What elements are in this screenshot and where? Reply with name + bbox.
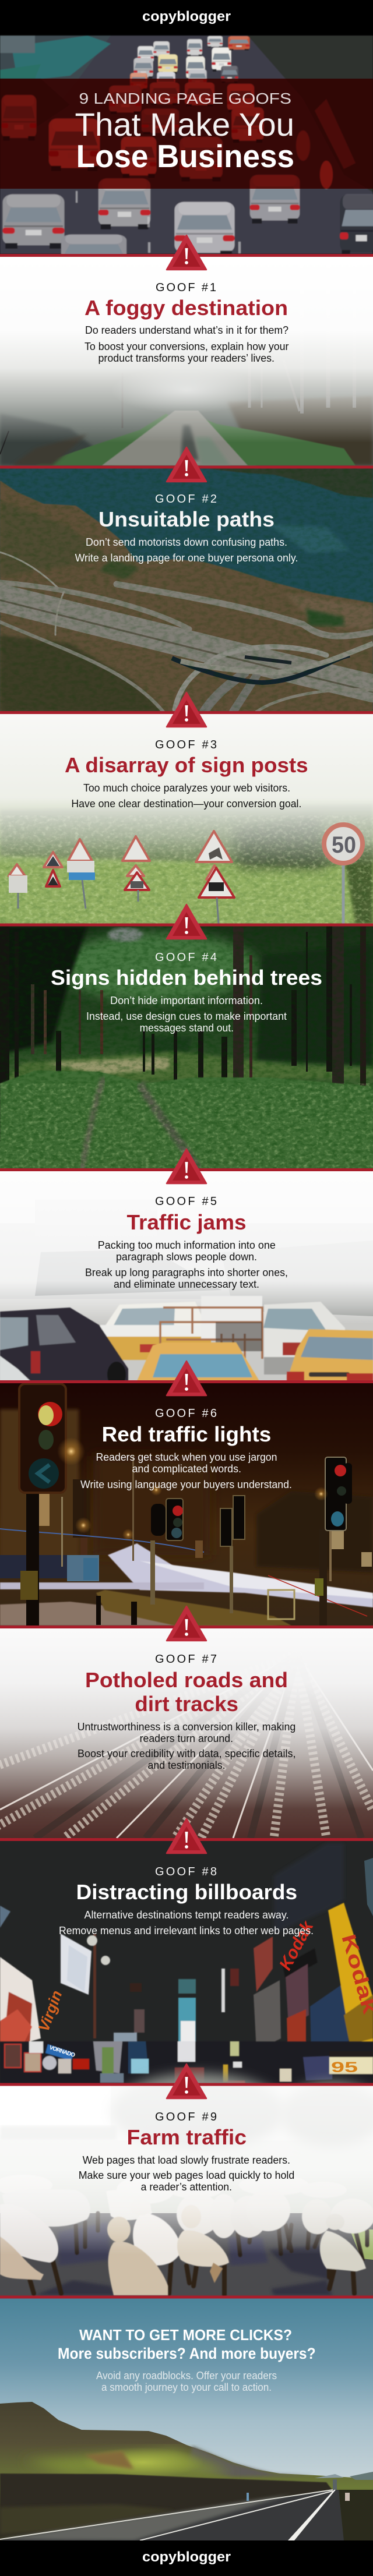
body text [79, 2154, 294, 2193]
billboard lettering [34, 1917, 373, 2076]
heading: Red traffic lights [102, 1422, 271, 1446]
panel: goof 5 [0, 1149, 373, 1387]
heading [85, 1668, 288, 1716]
panel: goof 4 [0, 904, 373, 1169]
body text: and eliminate unnecessary text. [114, 1278, 259, 1290]
billboard lettering: VORNADO [48, 2044, 76, 2059]
goof label: GOOF #6 [155, 1407, 218, 1420]
goof label: GOOF #8 [155, 1865, 218, 1878]
body text: Untrustworthiness is a conversion killer, making [78, 1721, 295, 1733]
header bar with logo [0, 0, 373, 36]
body text: and testimonials. [148, 1759, 225, 1771]
title: That Make You [75, 106, 294, 143]
red divider [0, 711, 373, 714]
icon: warning triangle [167, 1361, 206, 1395]
billboard lettering: Kodak [276, 1917, 318, 1973]
body text [75, 536, 298, 564]
photo: open road under mountain [0, 2298, 373, 2540]
goof label: GOOF #1 [156, 281, 217, 294]
body text: paragraph slows people down. [116, 1251, 257, 1263]
fog overlay [0, 1628, 373, 1809]
title: Lose Business [76, 138, 294, 174]
billboard lettering: Virgin [34, 1988, 66, 2034]
fog overlay [0, 2086, 373, 2255]
red divider [0, 2296, 373, 2298]
panel: goof 6 [0, 1361, 373, 1627]
call to action heading [58, 2326, 316, 2362]
body text: To boost your conversions, explain how your [85, 341, 289, 352]
red divider [0, 1380, 373, 1383]
body text: Boost your credibility with data, specific details, [78, 1748, 296, 1759]
body text: Do readers understand what’s in it for them? [85, 324, 288, 336]
red title band [0, 79, 373, 189]
red divider [0, 1168, 373, 1171]
goof label: GOOF #9 [155, 2111, 218, 2123]
icon: warning triangle [167, 235, 206, 270]
heading: Traffic jams [127, 1210, 246, 1234]
body text [80, 1451, 292, 1490]
icon: warning triangle [167, 447, 206, 482]
heading: Unsuitable paths [98, 507, 275, 531]
body text: Have one clear destination—your conversion goal. [71, 798, 301, 810]
photo: road signs on a green verge [0, 714, 373, 925]
heading: A disarray of sign posts [65, 753, 308, 777]
goof label: GOOF #4 [155, 951, 218, 964]
body text: a reader’s attention. [141, 2181, 232, 2193]
icon: warning triangle [167, 1149, 206, 1183]
panel: goof 2 [0, 447, 373, 713]
body text: Packing too much information into one [98, 1239, 276, 1251]
body text: Write a landing page for one buyer persona only. [75, 552, 298, 564]
icon: warning triangle [167, 692, 206, 727]
body text [71, 782, 301, 810]
heading: Potholed roads and [85, 1668, 288, 1692]
photo: congested road from above [0, 36, 373, 274]
logo: copyblogger: copyblogger [142, 2549, 231, 2565]
panel: call to action [0, 2296, 373, 2540]
body text: Too much choice paralyzes your web visitors. [83, 782, 290, 794]
photo: forest track [0, 926, 373, 1169]
body text: Instead, use design cues to make important [86, 1010, 287, 1022]
icon: warning triangle [167, 2064, 206, 2098]
photo: traffic jam [0, 1171, 373, 1387]
red divider [0, 1838, 373, 1841]
body text [85, 324, 289, 364]
photo: highway interchange aerial [0, 468, 373, 713]
call to action text: a smooth journey to your call to action. [101, 2381, 272, 2393]
panel: goof 1 [0, 235, 373, 466]
icon: warning triangle [167, 1606, 206, 1641]
body text: and complicated words. [132, 1463, 241, 1475]
footer bar with logo [0, 2540, 373, 2576]
heading: A foggy destination [85, 296, 288, 320]
goof label: GOOF #2 [155, 493, 218, 506]
red divider [0, 254, 373, 257]
call to action heading: More subscribers? And more buyers? [58, 2345, 316, 2362]
heading: Distracting billboards [76, 1880, 297, 1904]
body text [85, 1239, 288, 1290]
heading: dirt tracks [135, 1692, 238, 1716]
body text: Remove menus and irrelevant links to other web pages. [59, 1925, 314, 1937]
logo: copyblogger: copyblogger [142, 9, 231, 24]
goof label: GOOF #5 [155, 1195, 218, 1208]
photo: foggy road [0, 256, 373, 466]
body text: Break up long paragraphs into shorter ones, [85, 1267, 288, 1278]
body text: Don’t hide important information. [110, 995, 263, 1006]
goof label: GOOF #3 [155, 738, 218, 751]
fog overlay [0, 1171, 373, 1324]
body text [59, 1909, 314, 1937]
body text [78, 1721, 296, 1771]
call to action text: Avoid any roadblocks. Offer your readers [96, 2370, 277, 2381]
photo: Times Square billboards [0, 1840, 373, 2084]
red divider [0, 1626, 373, 1628]
body text [86, 995, 287, 1034]
heading: Farm traffic [127, 2125, 247, 2149]
photo: traffic lights at night [0, 1383, 373, 1627]
panel: goof 9 [0, 2064, 373, 2296]
heading: Signs hidden behind trees [51, 966, 322, 990]
icon: warning triangle [167, 904, 206, 939]
red divider [0, 924, 373, 926]
body text: readers turn around. [140, 1733, 233, 1744]
call to action heading: WANT TO GET MORE CLICKS? [79, 2326, 292, 2344]
title [75, 90, 294, 174]
billboard lettering: 95 [331, 2059, 358, 2076]
body text: Don’t send motorists down confusing paths. [86, 536, 287, 548]
photo: tyre tracks in dirt [0, 1628, 373, 1839]
body text: Web pages that load slowly frustrate readers. [83, 2154, 290, 2166]
body text: Alternative destinations tempt readers away. [84, 1909, 289, 1921]
body text: messages stand out. [140, 1022, 234, 1034]
title: 9 LANDING PAGE GOOFS [79, 90, 291, 107]
panel: goof 3 [0, 692, 373, 925]
photo: sheep on a road [0, 2073, 373, 2296]
red divider [0, 466, 373, 468]
panel: goof 8 [0, 1819, 373, 2084]
fog overlay [0, 256, 373, 443]
goof label: GOOF #7 [155, 1653, 218, 1666]
red divider [0, 2083, 373, 2086]
icon: warning triangle [167, 1819, 206, 1853]
signs group [9, 825, 363, 924]
call to action text [96, 2370, 277, 2393]
body text: Make sure your web pages load quickly to hold [79, 2169, 294, 2181]
body text: product transforms your readers’ lives. [98, 352, 275, 364]
hero panel: traffic photo and title [0, 36, 373, 274]
panel: goof 7 [0, 1606, 373, 1839]
body text: Write using language your buyers understand. [80, 1479, 292, 1490]
body text: Readers get stuck when you use jargon [96, 1451, 277, 1463]
speed sign number: 50 [332, 832, 356, 858]
